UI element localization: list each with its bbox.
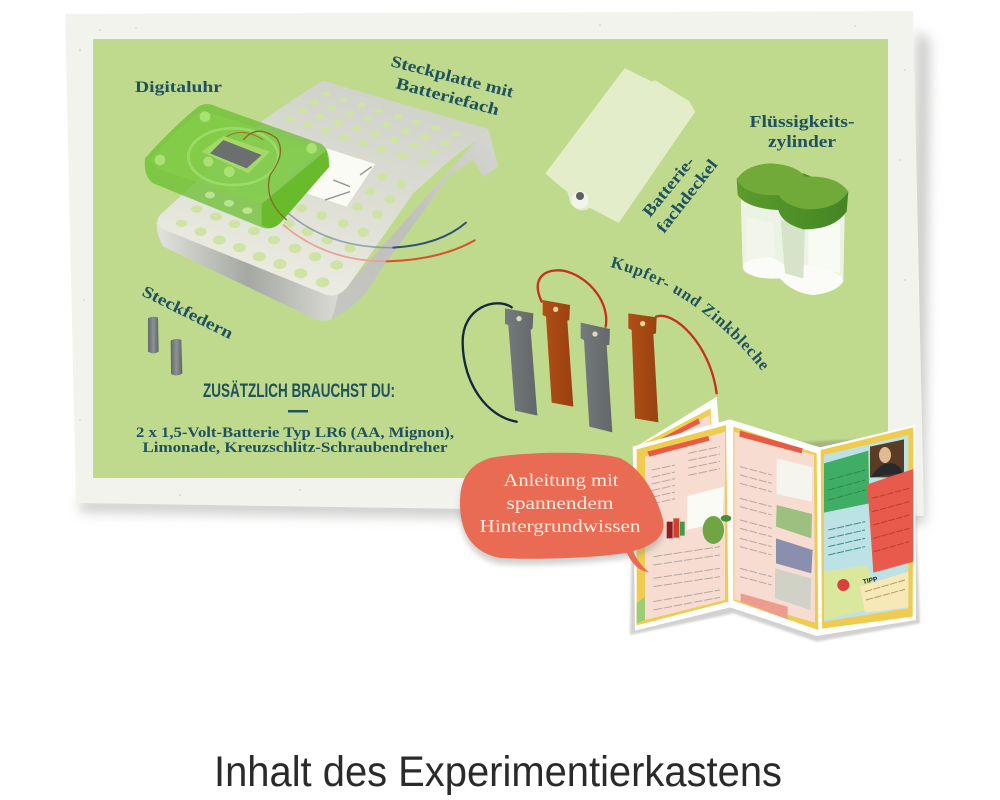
additional items block	[136, 379, 454, 456]
red note	[867, 469, 913, 573]
jar body	[741, 193, 845, 293]
green panel	[93, 39, 888, 478]
required items text: 2 x 1,5-Volt-Batterie Typ LR6 (AA, Mignon),	[136, 425, 454, 441]
caption: Inhalt des Experimentierkastens	[214, 748, 782, 796]
item: Kupfer- und Zinkbleche	[463, 270, 717, 432]
required items text: Limonade, Kreuzschlitz-Schraubendreher	[142, 440, 448, 456]
callout	[460, 453, 663, 572]
required items text	[136, 425, 454, 456]
center panel	[733, 427, 818, 630]
item: Steckfedern	[148, 317, 182, 376]
tray right skirt	[317, 129, 498, 320]
paper card	[65, 11, 930, 524]
item: Digitaluhr	[145, 104, 329, 229]
heading: Zusätzlich brauchst du: ZUSÄTZLICH BRAUCHST DU:	[203, 379, 395, 402]
tray top face	[158, 81, 488, 296]
back flap	[633, 397, 719, 448]
label: Kupfer- und Zinkbleche: Kupfer- und Zinkbleche	[610, 256, 767, 370]
booklet	[630, 397, 920, 642]
label: Steckplatte mit Batteriefach: Batteriefach	[394, 74, 501, 119]
callout text: spannendem	[506, 493, 614, 513]
display	[202, 136, 270, 173]
label: Steckplatte mit Batteriefach: Steckplatte mit	[389, 51, 516, 102]
tray front skirt	[157, 220, 338, 321]
label: Steckplatte mit Batteriefach	[389, 51, 516, 119]
label: Batteriefachdeckel	[638, 153, 722, 236]
callout text: Hintergrundwissen	[480, 516, 641, 536]
item: Flüssigkeitszylinder	[737, 163, 848, 295]
label: Flüssigkeitszylinder: Flüssigkeits-	[750, 112, 854, 131]
right panel	[821, 427, 913, 629]
callout text: Anleitung mit	[504, 470, 619, 490]
label: Steckfedern: Steckfedern	[139, 282, 236, 343]
bottles and leaves	[667, 522, 673, 538]
jar lid	[737, 173, 848, 229]
label: Batteriefachdeckel: fachdeckel	[652, 155, 722, 236]
wires	[283, 213, 475, 261]
callout text	[480, 470, 641, 536]
item: Steckplatte	[157, 81, 498, 321]
portrait	[870, 439, 904, 477]
label: Digitaluhr: Digitaluhr	[135, 79, 222, 96]
sheet outline	[633, 419, 916, 636]
label: Batteriefachdeckel: Batterie-	[638, 153, 698, 221]
left panel	[637, 425, 728, 625]
tip label: TIPP	[862, 576, 879, 586]
label: Flüssigkeitszylinder: zylinder	[768, 132, 836, 151]
item: Batteriefachdeckel	[547, 69, 694, 222]
holes	[176, 92, 461, 287]
battery compartment	[307, 148, 375, 207]
label: Flüssigkeitszylinder	[750, 112, 854, 151]
